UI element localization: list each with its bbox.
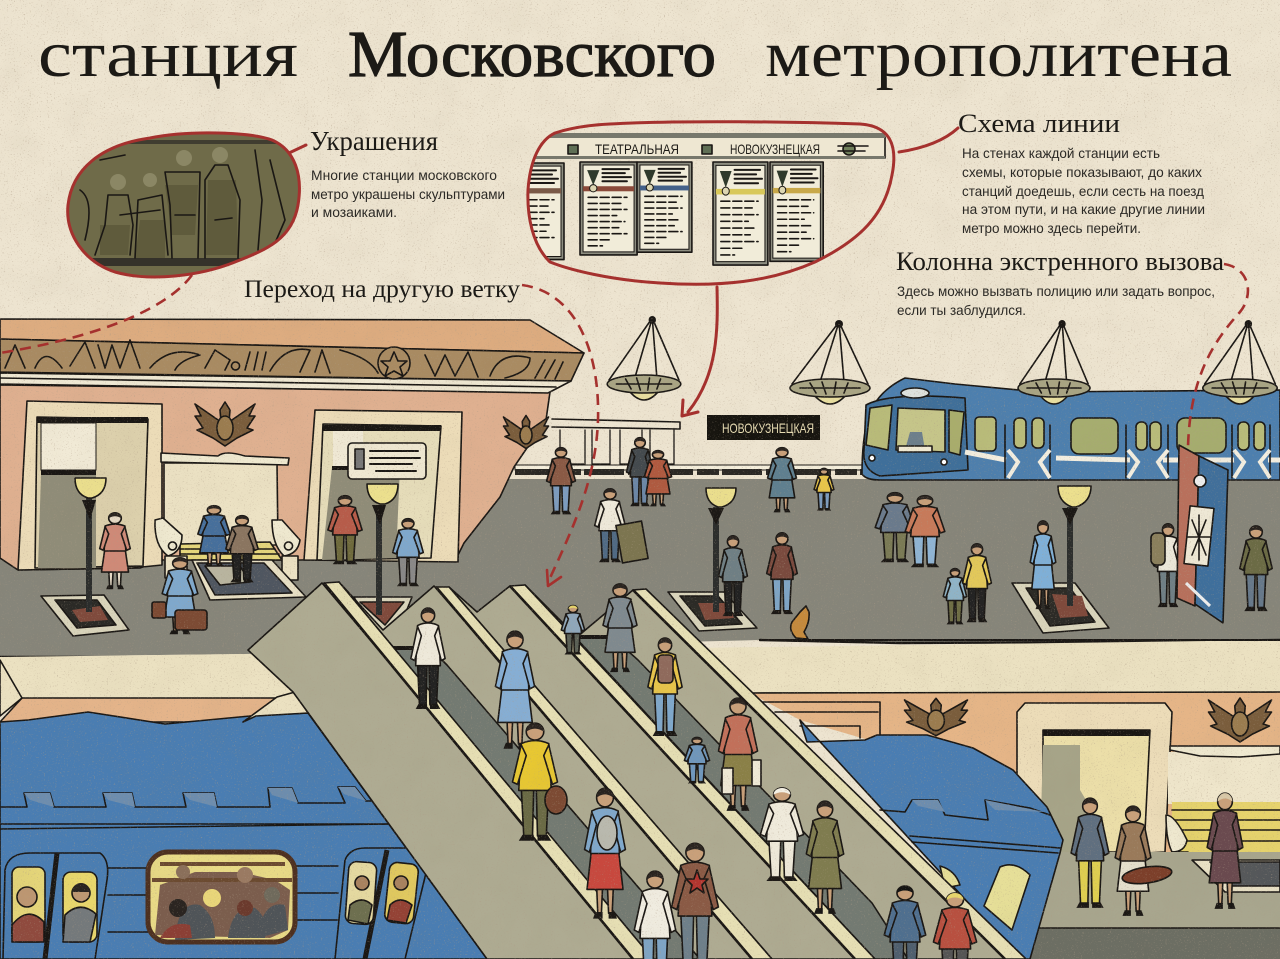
cream ledge corner [243,692,308,722]
callout: emergency column: Здесь можно вызвать полицию или задать вопрос, [897,283,1215,299]
lower level: cream ledge and walls [0,640,1280,959]
hanging chandeliers [607,316,1277,404]
handrail strips [324,582,653,959]
callout: emergency column: Колонна экстренного вызова [896,247,1224,276]
left wall with doorways [0,385,550,600]
right floor [1033,852,1280,928]
cornice with frieze [0,319,584,393]
emblems [904,698,968,736]
lower left train [0,692,487,959]
balustrade 1 [248,583,640,959]
carpet [192,560,306,600]
balustrade 3 [449,586,860,959]
station name sign [707,415,820,440]
cat [791,606,809,639]
cab windows [866,388,964,465]
heading: line map: Схема линии [958,109,1120,138]
text: line map: на этом пути, и на какие другие линии [962,201,1205,217]
platform floor, upper level [0,479,1280,657]
escalators [248,582,1026,959]
roof vents [0,787,372,807]
emergency call column [1177,445,1228,623]
lower right train [800,720,1063,959]
callout: transfer [244,276,598,586]
door pair right [335,848,426,959]
map sign bar: ТЕАТРАЛЬНАЯ [595,141,679,157]
callout: emergency column [896,247,1248,447]
map sign bar: НОВОКУЗНЕЦКАЯ [730,141,820,157]
middle section with belt [339,582,760,959]
text: decorations: метро украшены скульптурами [311,186,505,202]
right doorway [1017,703,1172,860]
text: decorations: и мозаиками. [311,204,397,220]
train window [984,865,1030,930]
text: line map [962,145,1205,236]
right bench niche [1166,746,1280,874]
lamp posts [89,498,1070,615]
platform lamps [41,478,1109,636]
direction sign [348,443,426,479]
callout: transfer: Переход на другую ветку [244,276,521,303]
lamp bases [41,595,129,636]
door pair left [3,853,108,959]
upper train [862,378,1280,480]
text: line map: На стенах каждой станции есть [962,145,1160,161]
people on upper platform [100,438,1272,639]
left doorway fragment [760,702,880,738]
title: метрополитена [765,18,1232,91]
text: line map: схемы, которые показывают, до каких [962,164,1202,180]
title [38,18,1232,91]
map sign bar [530,133,885,159]
map medallion [508,122,894,284]
title: Московского [348,18,716,91]
people on lower right platform [1071,793,1243,916]
crowded window [148,852,295,942]
back wall with station name [515,415,865,472]
right section with belt [525,585,1010,959]
text: line map: метро можно здесь перейти. [962,220,1141,236]
text: decorations: Многие станции московского [311,167,497,183]
heading: decorations: Украшения [310,126,438,156]
callout: emergency column: если ты заблудился. [897,302,1026,318]
eagle emblems [195,402,255,446]
title: станция [38,18,298,91]
bench niche [155,453,306,600]
callout: line map [508,109,1205,416]
lamp globes [75,478,106,498]
doorway left [18,401,162,570]
station name sign: НОВОКУЗНЕЦКАЯ [722,420,814,436]
text: line map: станций доедешь, если сесть на поезд [962,183,1204,199]
doorway right [304,410,462,562]
text: decorations [311,167,505,220]
people on escalators [411,584,977,959]
relief medallion [60,130,305,280]
callout: decorations [0,126,505,353]
